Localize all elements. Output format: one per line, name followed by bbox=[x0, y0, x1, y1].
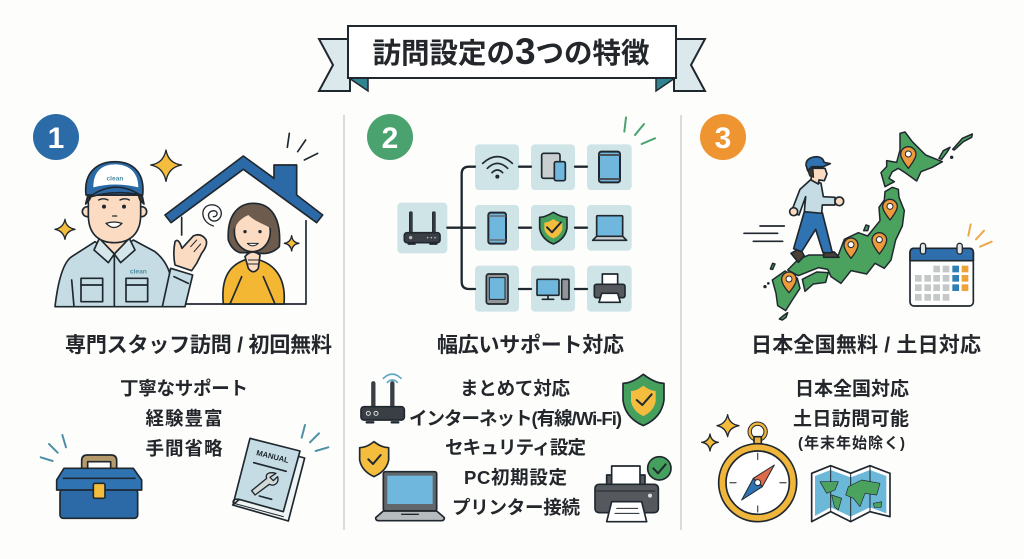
panel: expert staff visit bbox=[33, 114, 332, 521]
icon: compass bbox=[702, 415, 797, 522]
icon: toolbox bbox=[41, 435, 142, 518]
feature list 2: まとめて対応 bbox=[460, 378, 570, 399]
feature list 3: (年末年始除く) bbox=[798, 434, 905, 452]
icon: router with wifi bbox=[361, 374, 404, 422]
title banner: 3 bbox=[515, 31, 536, 72]
feature list 1: 手間省略 bbox=[146, 438, 223, 459]
feature list 1: 経験豊富 bbox=[146, 408, 222, 429]
heading 1: 専門スタッフ訪問 / 初回無料 bbox=[65, 334, 332, 357]
title banner: つの特徴 bbox=[536, 38, 650, 70]
feature list 1 bbox=[120, 378, 248, 459]
icon: yellow shield bbox=[360, 442, 389, 477]
badge 2: 2 bbox=[382, 122, 398, 155]
icon: laptop bbox=[376, 472, 444, 521]
badge 1 bbox=[33, 114, 79, 160]
feature list 1: 丁寧なサポート bbox=[120, 378, 248, 399]
badge 3: 3 bbox=[715, 122, 731, 155]
feature list 2: セキュリティ設定 bbox=[445, 437, 586, 458]
icon: manual bbox=[233, 425, 328, 521]
heading 2: 幅広いサポート対応 bbox=[437, 334, 624, 357]
feature list 2: インターネット(有線/Wi-Fi) bbox=[409, 408, 622, 429]
feature list 3 bbox=[793, 378, 909, 452]
panel: broad support bbox=[360, 114, 671, 522]
icon: manual: MANUAL bbox=[255, 448, 290, 465]
badge 1: 1 bbox=[48, 122, 64, 155]
map: Japan with location pins bbox=[763, 132, 972, 320]
feature list 2: PC初期設定 bbox=[464, 467, 567, 488]
diagram: router connected to devices bbox=[397, 117, 655, 312]
badge 3 bbox=[700, 114, 746, 160]
icon: printer with check bbox=[595, 457, 671, 522]
feature list 3: 日本全国対応 bbox=[795, 378, 909, 400]
feature list 2: プリンター接続 bbox=[452, 497, 580, 518]
illustration: walking staff member bbox=[744, 157, 844, 262]
icon: calendar bbox=[910, 224, 992, 306]
illustration: staff member and customer at home: clean bbox=[130, 268, 147, 275]
heading 3: 日本全国無料 / 土日対応 bbox=[751, 334, 981, 357]
feature list 3: 土日訪問可能 bbox=[793, 408, 909, 430]
panel: nationwide coverage bbox=[700, 114, 992, 522]
illustration: staff member and customer at home bbox=[55, 133, 323, 307]
illustration: staff member and customer at home: clean bbox=[106, 175, 124, 182]
icon: green shield bbox=[623, 374, 664, 426]
title banner: 訪問設定の bbox=[372, 38, 515, 70]
title banner bbox=[319, 26, 705, 91]
feature list 2 bbox=[409, 378, 622, 518]
badge 2 bbox=[367, 114, 413, 160]
icon: folded world map bbox=[812, 466, 890, 522]
